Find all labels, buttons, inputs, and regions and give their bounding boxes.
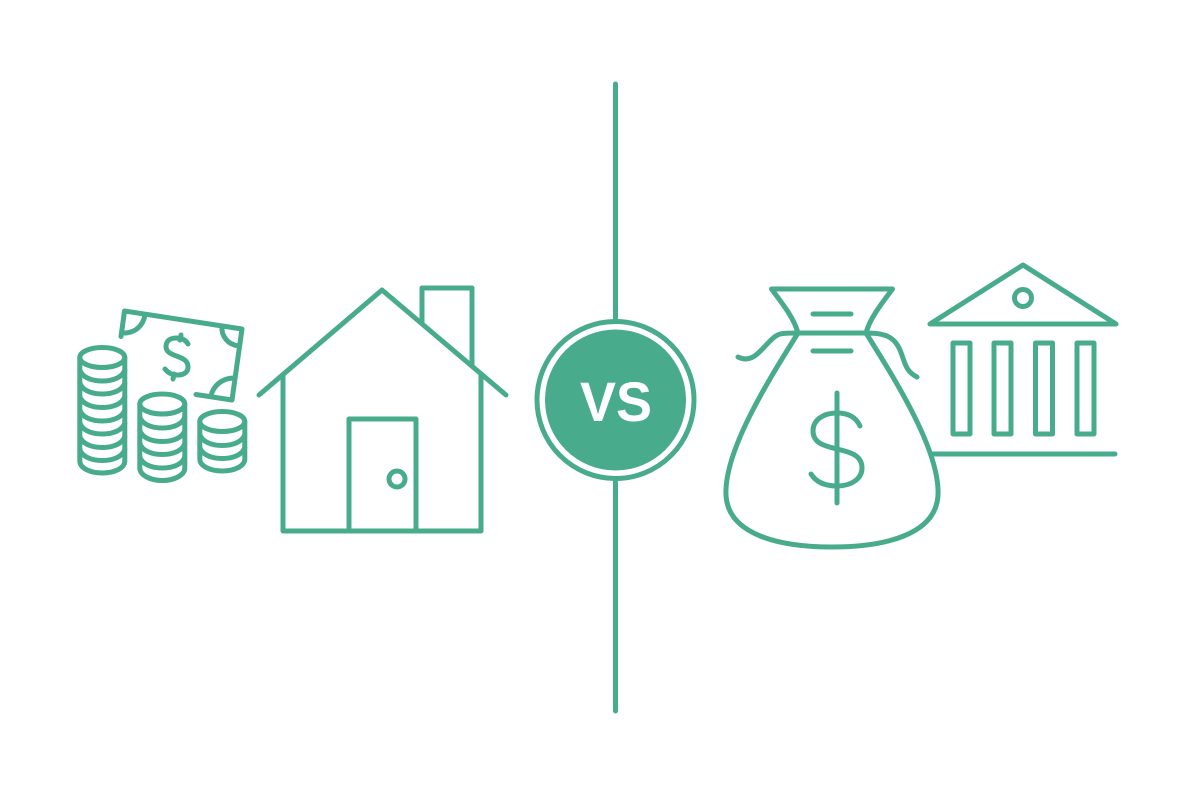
- icon: tall coin stack: [80, 348, 125, 473]
- icon: house: [259, 288, 506, 531]
- vertical divider line: [613, 84, 618, 711]
- badge ring: [537, 322, 694, 478]
- badge fill: [545, 330, 686, 470]
- icon: banknote: [121, 311, 242, 400]
- icon: bank building: [930, 265, 1116, 454]
- icon: medium coin stack: [140, 394, 185, 480]
- VS badge: [537, 322, 694, 478]
- icon: short coin stack: [200, 412, 245, 471]
- icon: money bag: [726, 289, 938, 547]
- VS label: VS: [580, 370, 652, 433]
